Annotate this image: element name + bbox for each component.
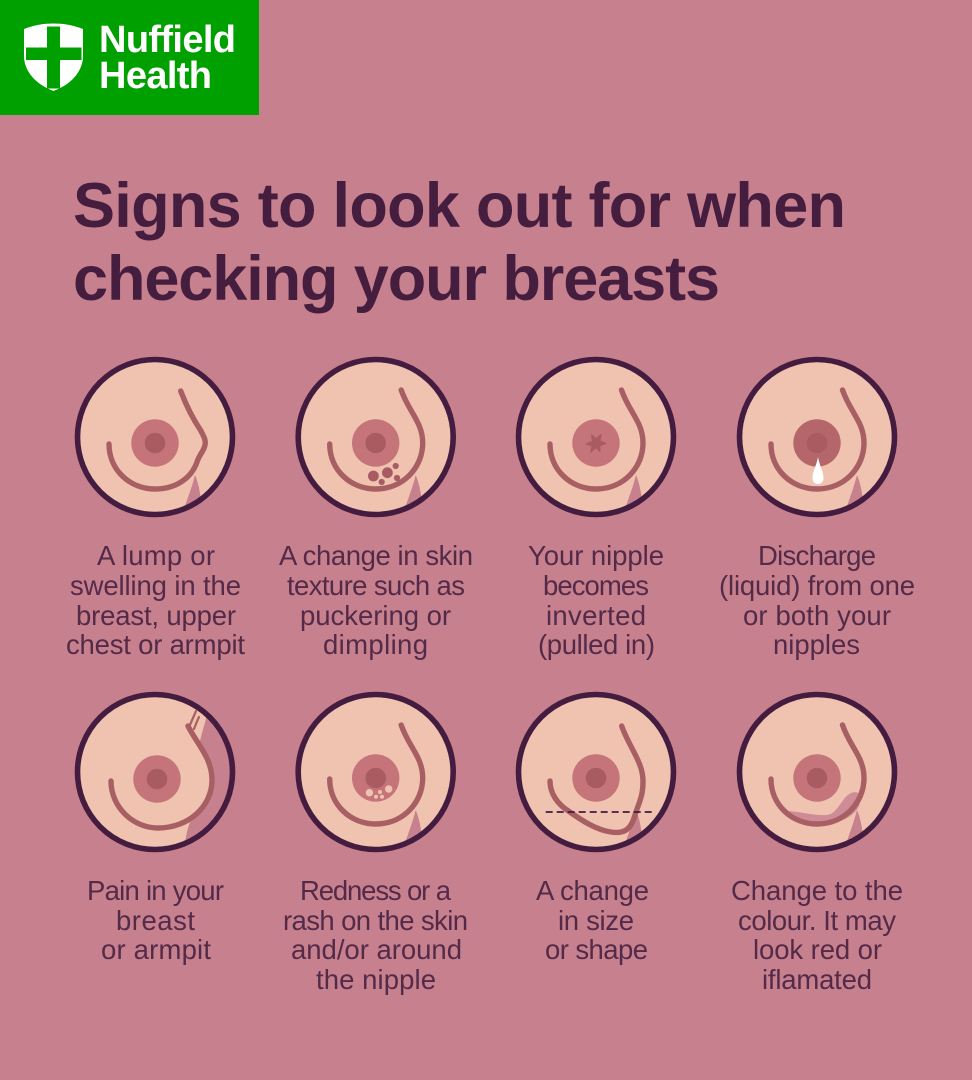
icon: breast with inverted nipple xyxy=(518,359,674,515)
colour patch xyxy=(785,792,860,824)
label: discharge xyxy=(719,540,915,660)
dashed line xyxy=(546,811,652,813)
label: redness or rash: rash on the skin xyxy=(283,905,468,936)
label: discharge: nipples xyxy=(773,629,860,660)
title xyxy=(73,171,846,314)
label: discharge: or both your xyxy=(743,600,891,631)
panel: discharge xyxy=(719,359,915,660)
label: skin texture xyxy=(279,540,473,660)
label: lump or swelling: swelling in the xyxy=(70,570,241,601)
label: discharge: (liquid) from one xyxy=(719,570,915,601)
label: colour change: Change to the xyxy=(731,875,903,906)
logo: Nuffield Health xyxy=(0,0,259,115)
label: redness or rash: the nipple xyxy=(316,964,436,995)
label: colour change: iflamated xyxy=(762,964,872,995)
label: lump or swelling: chest or armpit xyxy=(66,629,245,660)
label: inverted nipple: inverted xyxy=(546,600,646,631)
panel: redness or rash xyxy=(283,694,468,995)
panel: inverted nipple xyxy=(518,359,674,660)
label: redness or rash xyxy=(283,875,468,995)
title: checking your breasts xyxy=(73,244,720,314)
panel: skin texture xyxy=(279,359,473,660)
label: colour change xyxy=(731,875,903,995)
title: Signs to look out for when xyxy=(73,171,846,241)
label: skin texture: A change in skin xyxy=(279,540,473,571)
logo wordmark: Health xyxy=(99,55,212,97)
icon: breast with pain lines xyxy=(77,694,245,850)
label: skin texture: dimpling xyxy=(323,629,428,660)
label: size or shape: A change xyxy=(536,875,649,906)
label: pain: or armpit xyxy=(101,934,211,965)
icon: breast with size line xyxy=(518,694,674,850)
label: skin texture: puckering or xyxy=(300,600,451,631)
icon: breast with lump xyxy=(77,359,233,515)
label: inverted nipple: Your nipple xyxy=(528,540,664,571)
label: pain: breast xyxy=(116,905,195,936)
label: discharge: Discharge xyxy=(758,540,876,571)
label: inverted nipple xyxy=(528,540,664,660)
icon: breast with puckered skin xyxy=(298,359,454,515)
label: inverted nipple: becomes xyxy=(543,570,649,601)
logo wordmark: Nuffield xyxy=(99,19,236,61)
icon: inverted nipple star xyxy=(586,434,606,452)
label: skin texture: texture such as xyxy=(287,570,465,601)
label: inverted nipple: (pulled in) xyxy=(538,629,655,660)
logo wordmark xyxy=(99,19,236,97)
icon: breast with discharge xyxy=(739,359,895,515)
icon: breast with colour patch xyxy=(739,694,895,850)
panel: lump or swelling xyxy=(66,359,245,660)
label: lump or swelling: A lump or xyxy=(97,540,215,571)
label: size or shape xyxy=(536,875,649,965)
label: pain xyxy=(87,875,224,965)
icon: shield with cross xyxy=(24,24,83,91)
label: lump or swelling: breast, upper xyxy=(76,600,236,631)
panel: change in size or shape xyxy=(518,694,674,965)
label: size or shape: in size xyxy=(558,905,634,936)
label: pain: Pain in your xyxy=(87,875,224,906)
panel: colour change xyxy=(731,694,903,995)
icon: white drop xyxy=(812,457,824,484)
label: colour change: colour. It may xyxy=(738,905,896,936)
label: size or shape: or shape xyxy=(545,934,648,965)
panel: pain xyxy=(77,694,245,965)
icon: breast with rash xyxy=(298,694,454,850)
label: colour change: look red or xyxy=(753,934,882,965)
label: redness or rash: Redness or a xyxy=(300,875,452,906)
label: lump or swelling xyxy=(66,540,245,660)
label: redness or rash: and/or around xyxy=(291,934,462,965)
